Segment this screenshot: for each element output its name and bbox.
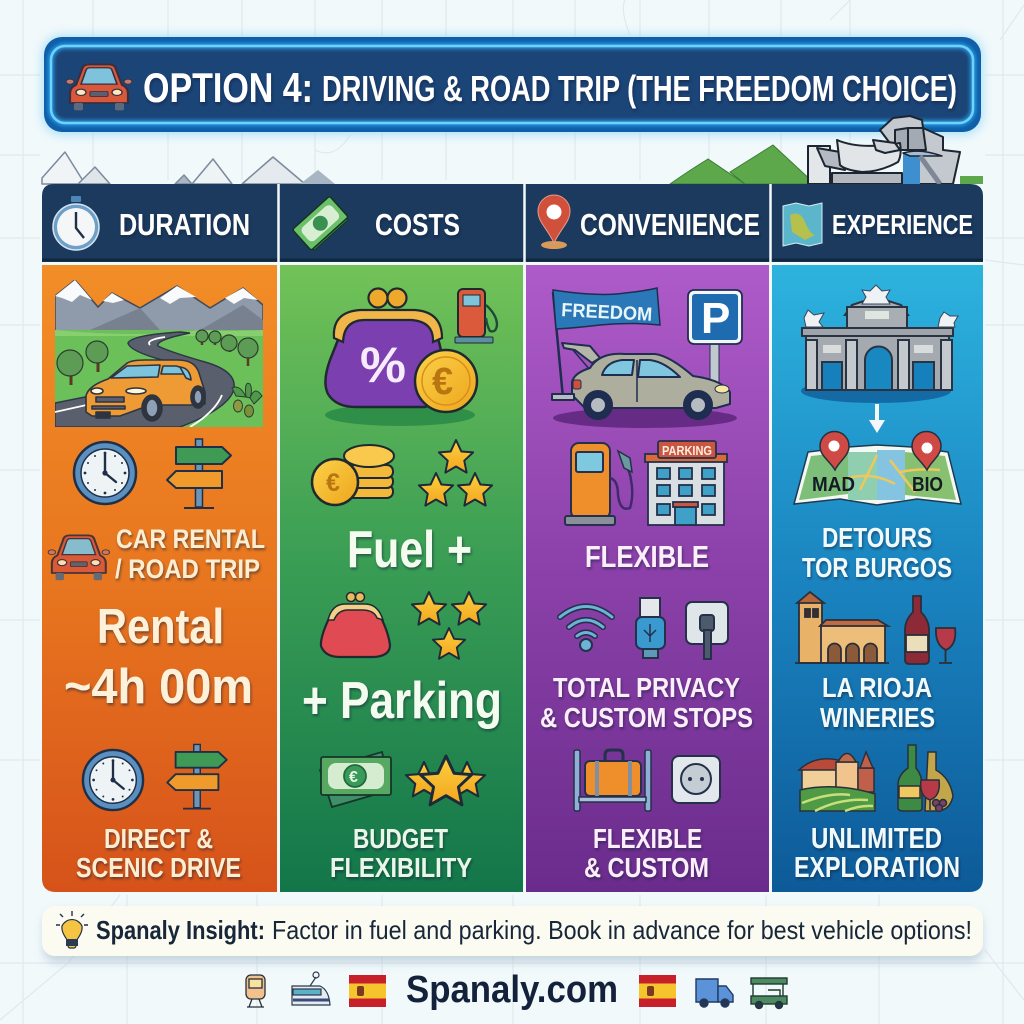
- icon: banknotes: €: [349, 769, 358, 786]
- text: rental duration: [64, 600, 253, 714]
- icon: location pin: [538, 195, 570, 249]
- heading: experience: EXPERIENCE: [832, 209, 973, 240]
- heading: duration: DURATION: [119, 207, 250, 242]
- text: plus parking: + Parking: [302, 672, 502, 730]
- text: car rental / road trip: CAR RENTAL: [116, 524, 265, 554]
- text: car rental / road trip: [115, 524, 265, 584]
- icon: train front: [246, 975, 265, 1007]
- olive branch: [232, 383, 262, 417]
- icon: usb stick: [636, 598, 665, 658]
- text: flexible and custom: [584, 823, 709, 883]
- title text: OPTION 4:: [143, 64, 313, 111]
- illustration: road through mountains: [55, 280, 263, 427]
- icon: freedom flag: FREEDOM: [561, 300, 653, 326]
- text: unlimited exploration: [794, 823, 960, 884]
- icon: three stars: [419, 440, 492, 506]
- text: rental duration: Rental: [97, 600, 224, 654]
- icon: red car: [66, 64, 132, 110]
- text: budget flexibility: [330, 823, 472, 883]
- text: flexible and custom: & CUSTOM: [584, 852, 709, 883]
- icon: orange car: [86, 360, 205, 421]
- title banner: [42, 35, 983, 135]
- text: total privacy and custom stops: [540, 672, 753, 733]
- icon: wine bottle and glass: [905, 596, 955, 664]
- Guggenheim museum backdrop: [808, 116, 960, 184]
- icon: vineyard village: [799, 752, 875, 811]
- panel: duration: [42, 265, 277, 892]
- text: flexible and custom: FLEXIBLE: [593, 823, 702, 854]
- green hills backdrop: [670, 145, 983, 184]
- text: direct and scenic drive: DIRECT &: [104, 823, 213, 854]
- icon: route map MAD to BIO: MAD: [812, 474, 855, 496]
- text: detours for burgos: DETOURS: [822, 522, 932, 553]
- icon: coin stack: €: [326, 469, 340, 497]
- trees: [57, 330, 258, 385]
- text: budget flexibility: FLEXIBILITY: [330, 852, 472, 883]
- text: la rioja wineries: [820, 672, 935, 733]
- icon: wine bottles and grapes: [898, 745, 953, 812]
- icon: cash: [292, 196, 350, 252]
- icon: tram: [292, 972, 330, 1005]
- icon: fuel pump: [455, 289, 497, 343]
- panel: costs: [280, 265, 523, 892]
- icon: signpost: [167, 744, 227, 809]
- icon: luggage cart: [574, 750, 651, 811]
- icon: Spanish flag: [639, 975, 676, 1007]
- icon: route map MAD to BIO: BIO: [912, 474, 943, 496]
- icon: blue van: [696, 979, 733, 1007]
- heading: costs: COSTS: [375, 207, 460, 242]
- icon: Puerta de Alcala gate: [801, 285, 958, 403]
- icon: parking building: PARKING: [662, 443, 712, 458]
- text: la rioja wineries: LA RIOJA: [822, 672, 932, 703]
- mountains left backdrop: [42, 152, 335, 184]
- icon: red purse: [321, 592, 390, 657]
- text: detours for burgos: [802, 522, 952, 583]
- text: unlimited exploration: UNLIMITED: [811, 823, 942, 855]
- icon: small car: [48, 535, 110, 580]
- text: budget flexibility: BUDGET: [353, 823, 448, 854]
- icon: clock: [74, 442, 136, 504]
- icon: coin stack: [312, 445, 394, 505]
- column header bar: [42, 184, 983, 262]
- text: rental duration: ~4h 00m: [64, 660, 253, 714]
- icon: freedom flag: [553, 288, 660, 398]
- text: flexible: FLEXIBLE: [585, 539, 709, 574]
- panel: convenience: [526, 265, 769, 892]
- site name: Spanaly.com: [406, 969, 618, 1011]
- icon: orange fuel pump: [565, 443, 632, 525]
- icon: purple purse with euro coin: €: [432, 361, 453, 403]
- footer branding: [246, 969, 787, 1011]
- icon: winery building: [795, 592, 889, 663]
- icon: route map MAD to BIO: [794, 432, 961, 505]
- icon: parking sign: [688, 290, 742, 388]
- icon: grey car with open trunk: [552, 343, 737, 428]
- arrow: down: [869, 404, 885, 433]
- text: unlimited exploration: EXPLORATION: [794, 852, 960, 884]
- icon: banknotes: [320, 752, 391, 807]
- text: total privacy and custom stops: TOTAL PRIVACY: [553, 672, 740, 703]
- panel: experience: [772, 265, 983, 892]
- icon: Spanish flag: [349, 975, 386, 1007]
- text: detours for burgos: TOR BURGOS: [802, 552, 952, 583]
- icon: light bulb: [56, 911, 88, 948]
- icon: parking sign: P: [701, 294, 730, 343]
- title text: [143, 64, 957, 111]
- text: car rental / road trip: / ROAD TRIP: [115, 554, 260, 584]
- text: direct and scenic drive: SCENIC DRIVE: [76, 852, 241, 883]
- insight callout: [42, 906, 983, 962]
- icon: clock: [83, 750, 143, 810]
- icon: wall socket: [672, 756, 720, 803]
- text: fuel plus: Fuel +: [347, 521, 472, 579]
- icon: purple purse with euro coin: [325, 288, 477, 426]
- icon: stopwatch: [53, 196, 99, 250]
- text: total privacy and custom stops: & CUSTOM STOPS: [540, 702, 753, 733]
- icon: wall plug: [686, 602, 728, 659]
- icon: stars: [412, 592, 486, 659]
- icon: purple purse with euro coin: %: [360, 337, 406, 393]
- icon: parking building: [645, 441, 727, 525]
- icon: folded map: [783, 203, 822, 246]
- text: la rioja wineries: WINERIES: [820, 702, 935, 733]
- insight text: Spanaly Insight:: [96, 915, 265, 945]
- text: direct and scenic drive: [76, 823, 241, 883]
- icon: wifi: [560, 606, 612, 651]
- icon: green truck: [751, 978, 787, 1008]
- icon: overlapping stars: [406, 756, 485, 805]
- heading: convenience: CONVENIENCE: [580, 207, 760, 242]
- icon: signpost: [167, 439, 231, 508]
